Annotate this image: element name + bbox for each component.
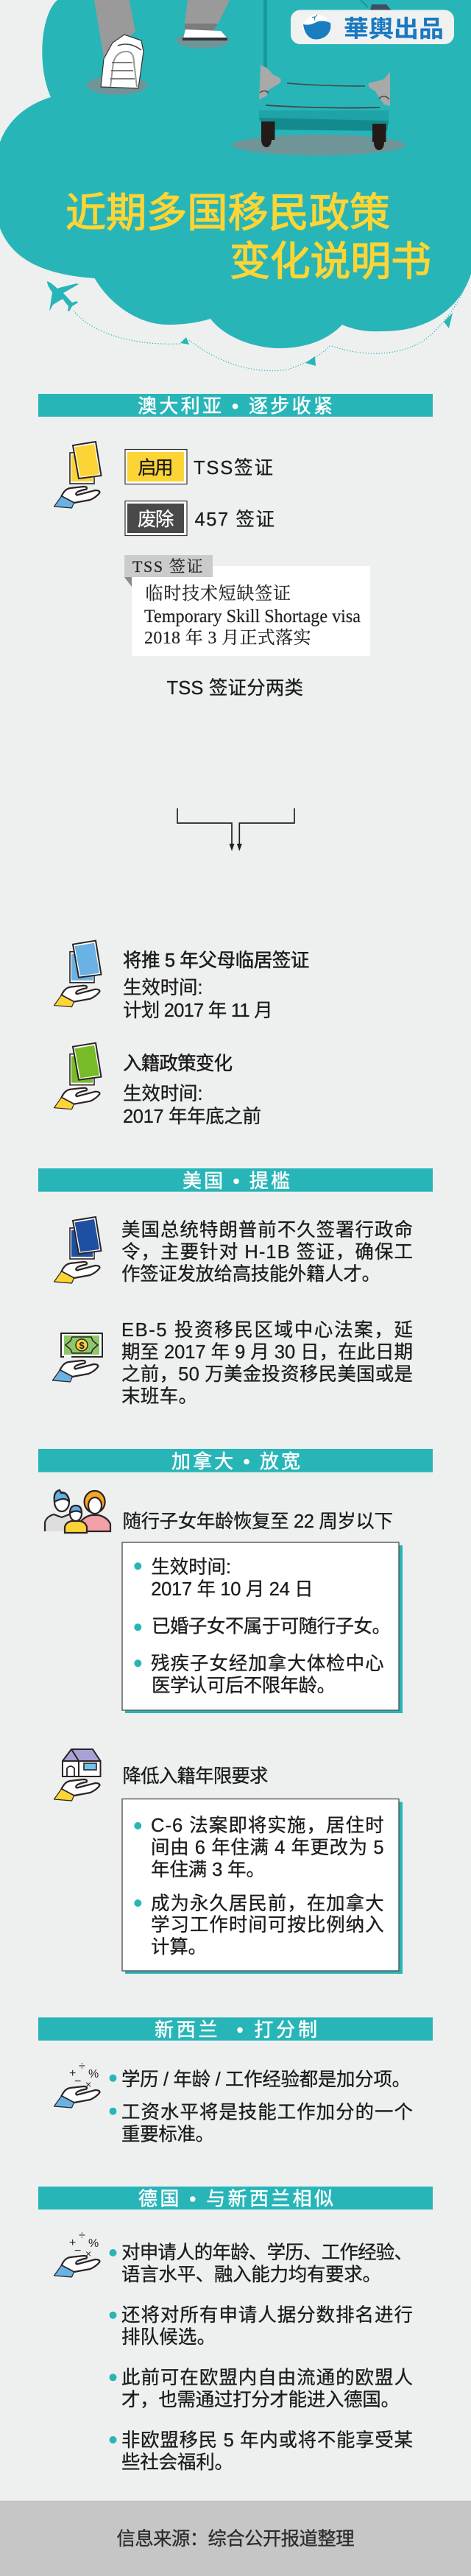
panel: New Zealand: [38, 2017, 433, 2145]
text: EB-5: 之前，50 万美金投资移民美国或是: [121, 1364, 413, 1385]
icon: family: [45, 1490, 110, 1533]
list: German requirements: 此前可在欧盟内自由流通的欧盟人: [121, 2368, 413, 2388]
tag: TSS enabled: TSS签证: [194, 458, 273, 479]
icon: math symbols on hand: %: [88, 2068, 99, 2081]
item: parent visa: 计划 2017 年 11 月: [123, 1001, 273, 1021]
text: TSS two types: TSS 签证分两类: [166, 678, 303, 699]
cloud shape: [0, 0, 471, 348]
box: citizenship details: 间由 6 年住满 4 年更改为 5: [151, 1838, 384, 1858]
icon: airplane: [47, 281, 79, 311]
icon: math symbols on hand: +: [69, 2067, 76, 2080]
list: points criteria: 学历 / 年龄 / 工作经验都是加分项。: [121, 2069, 411, 2090]
icon: math symbols on hand: [54, 2060, 100, 2108]
box: dependent details: 生效时间:: [151, 1557, 231, 1578]
heading: New Zealand: 新西兰 • 打分制: [155, 2019, 317, 2041]
list: German requirements: 些社会福利。: [121, 2452, 233, 2473]
tag: 457 abolished: 废除: [138, 509, 174, 530]
icon: yellow cards on hand: [54, 442, 102, 508]
text: H-1B executive order: 作签证发放给高技能外籍人才。: [121, 1264, 380, 1285]
list: German requirements: 语言水平、融入能力均有要求。: [121, 2265, 381, 2285]
box: citizenship details: C-6 法案即将实施，居住时: [151, 1815, 384, 1836]
icon: math symbols on hand: ÷: [79, 2060, 85, 2072]
illustration: walking legs: [87, 0, 230, 95]
item: parent visa: 将推 5 年父母临居签证: [123, 950, 309, 971]
list: points criteria: [109, 2069, 413, 2145]
box: citizenship details: 学习工作时间可按比例纳入: [151, 1915, 384, 1935]
list: German requirements: 非欧盟移民 5 年内或将不能享受某: [121, 2430, 413, 2451]
heading: New Zealand: [38, 2017, 433, 2041]
box: dependent details: 已婚子女不属于可随行子女。: [152, 1617, 391, 1637]
heading: Canada: 加拿大 • 放宽: [171, 1450, 300, 1472]
box: dependent details: [122, 1542, 403, 1713]
icon: banknote on hand: $: [79, 1340, 85, 1351]
item: citizenship policy: 2017 年年底之前: [123, 1107, 261, 1127]
flight path: dotted arrows: [74, 275, 469, 371]
text: EB-5: 末班车。: [121, 1386, 197, 1407]
heading: USA: [38, 1168, 433, 1192]
list: German requirements: 对申请人的年龄、学历、工作经验、: [121, 2242, 413, 2263]
icon: math symbols on hand: ×: [85, 2248, 91, 2259]
list: points criteria: 工资水平将是技能工作加分的一个: [121, 2103, 413, 2123]
item: citizenship policy: 入籍政策变化: [123, 1054, 233, 1074]
box: dependent details: 2017 年 10 月 24 日: [151, 1579, 314, 1600]
icon: green cards on hand: [54, 1043, 102, 1109]
tag: TSS enabled: 启用: [138, 458, 174, 479]
list: German requirements: 排队候选。: [121, 2327, 216, 2348]
box: citizenship details: 年住满 3 年。: [151, 1860, 265, 1880]
icon: dark blue cards on hand: [54, 1217, 102, 1283]
panel: Canada: [38, 1449, 433, 1974]
icon: house on hand: [54, 1749, 100, 1801]
box: dependent details: 医学认可后不限年龄。: [152, 1676, 336, 1696]
list: German requirements: 还将对所有申请人据分数排名进行: [121, 2305, 413, 2326]
tag: TSS enabled: [125, 449, 273, 484]
box: citizenship details: 成为永久居民前，在加拿大: [151, 1894, 384, 1914]
logo: [291, 10, 454, 44]
item: parent visa: [54, 941, 309, 1021]
icon: math symbols on hand: ×: [85, 2078, 91, 2090]
icon: blue cards on hand: [54, 941, 102, 1007]
callout: TSS definition: TSS 签证: [132, 557, 203, 576]
callout: TSS definition: Temporary Skill Shortage visa: [144, 607, 361, 627]
panel: Germany: [38, 2187, 433, 2473]
icon: math symbols on hand: −: [74, 2245, 81, 2257]
box: citizenship details: [122, 1799, 403, 1974]
icon: math symbols on hand: %: [88, 2237, 99, 2250]
icon: math symbols on hand: ÷: [79, 2229, 85, 2242]
panel: header cloud: [0, 0, 471, 371]
footer: source: 信息来源：综合公开报道整理: [116, 2529, 355, 2549]
text: EB-5: 期至 2017 年 9 月 30 日，在此日期: [121, 1342, 413, 1363]
footer: source: [0, 2501, 471, 2576]
icon: math symbols on hand: +: [69, 2237, 76, 2249]
tag: 457 abolished: 457 签证: [194, 509, 275, 530]
heading: Germany: [38, 2187, 433, 2210]
list: German requirements: [109, 2242, 413, 2473]
box: dependent details: 残疾子女经加拿大体检中心: [151, 1654, 384, 1674]
text: dependent age: 随行子女年龄恢复至 22 周岁以下: [122, 1511, 393, 1532]
tag: 457 abolished: [125, 501, 275, 536]
title: 变化说明书: [230, 239, 431, 284]
list: points criteria: 重要标准。: [121, 2125, 214, 2145]
text: H-1B executive order: 令，主要针对 H-1B 签证，确保工: [121, 1242, 413, 1263]
list: German requirements: 才，也需通过打分才能进入德国。: [121, 2390, 400, 2410]
item: citizenship policy: [54, 1043, 261, 1127]
icon: math symbols on hand: [54, 2229, 100, 2277]
text: EB-5: [121, 1320, 413, 1407]
icon: math symbols on hand: −: [74, 2075, 81, 2088]
heading: USA: 美国 • 提槛: [183, 1170, 290, 1192]
arrows: fork: [177, 808, 294, 851]
callout: TSS definition: 临时技术短缺签证: [146, 584, 291, 604]
heading: Germany: 德国 • 与新西兰相似: [138, 2188, 333, 2210]
illustration: suitcase: [233, 0, 406, 155]
panel: USA: [38, 1168, 433, 1407]
title: 近期多国移民政策: [65, 190, 390, 236]
box: citizenship details: 计算。: [151, 1937, 207, 1958]
heading: Canada: [38, 1449, 433, 1472]
text: H-1B executive order: 美国总统特朗普前不久签署行政命: [121, 1220, 413, 1241]
text: H-1B executive order: [121, 1220, 413, 1285]
heading: Australia: [38, 394, 433, 417]
logo: 華輿出品: [344, 15, 444, 42]
title: [65, 190, 431, 284]
callout: TSS definition: [124, 555, 370, 656]
callout: TSS definition: 2018 年 3 月正式落实: [144, 628, 311, 648]
item: parent visa: 生效时间:: [123, 978, 203, 998]
text: EB-5: EB-5 投资移民区域中心法案，延: [121, 1320, 413, 1341]
heading: Australia: 澳大利亚 • 逐步收紧: [138, 395, 333, 417]
item: citizenship policy: 生效时间:: [123, 1084, 203, 1104]
text: reduce citizenship years: 降低入籍年限要求: [122, 1766, 268, 1787]
icon: banknote on hand: [52, 1333, 102, 1382]
panel: Australia: [38, 394, 433, 1127]
